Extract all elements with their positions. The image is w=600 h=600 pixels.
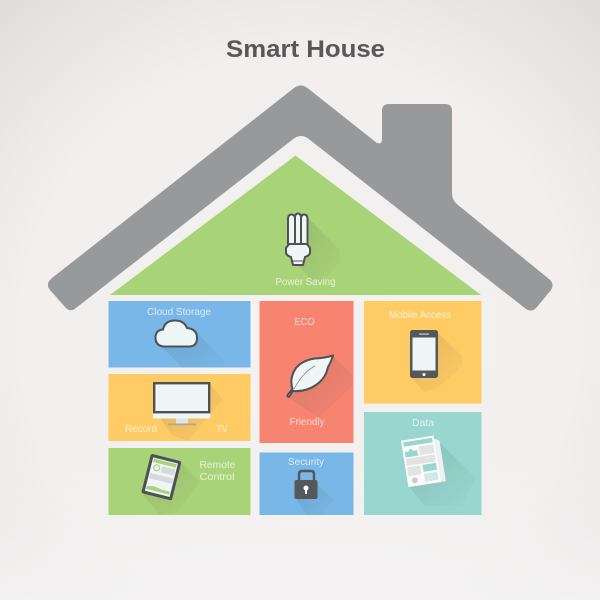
icon: phone (410, 330, 438, 378)
icon: document (401, 435, 446, 487)
panel: mobile access (364, 301, 482, 404)
panel: data (364, 412, 482, 515)
roof with chimney (48, 86, 553, 311)
leaf shadow (290, 356, 353, 418)
phone shadow (410, 332, 462, 392)
security label: Security (288, 457, 324, 468)
bulb shadow (298, 216, 340, 285)
document shadow (410, 437, 476, 506)
panel: remote control: Control (200, 472, 234, 483)
tv shadow (160, 383, 223, 441)
icon: bulb (286, 214, 310, 265)
friendly label: Friendly (290, 417, 324, 428)
cloud shadow (161, 332, 231, 367)
panel: power saving (110, 156, 481, 295)
icon: monitor (153, 382, 210, 425)
icon: cloud (155, 320, 197, 346)
icon: tablet (141, 454, 182, 501)
icon: lock (294, 471, 318, 499)
data label: Data (412, 418, 434, 429)
mobile access label: Mobile Access (389, 310, 451, 321)
remote control label: Remote (200, 460, 236, 471)
tv label: TV (216, 424, 228, 435)
panel: cloud storage (108, 301, 250, 368)
icon: leaf (287, 356, 333, 397)
cloud storage label: Cloud Storage (147, 307, 211, 318)
eco label: ECO (294, 317, 315, 328)
power saving label: Power Saving (276, 277, 336, 288)
lock shadow (296, 483, 334, 515)
title: Smart House (226, 36, 385, 63)
panel: security (260, 452, 354, 515)
tablet shadow (143, 462, 200, 515)
panel: eco friendly (260, 301, 354, 443)
record label: Record (125, 424, 157, 435)
panel: remote control (108, 448, 250, 515)
panel: record tv (108, 374, 250, 441)
